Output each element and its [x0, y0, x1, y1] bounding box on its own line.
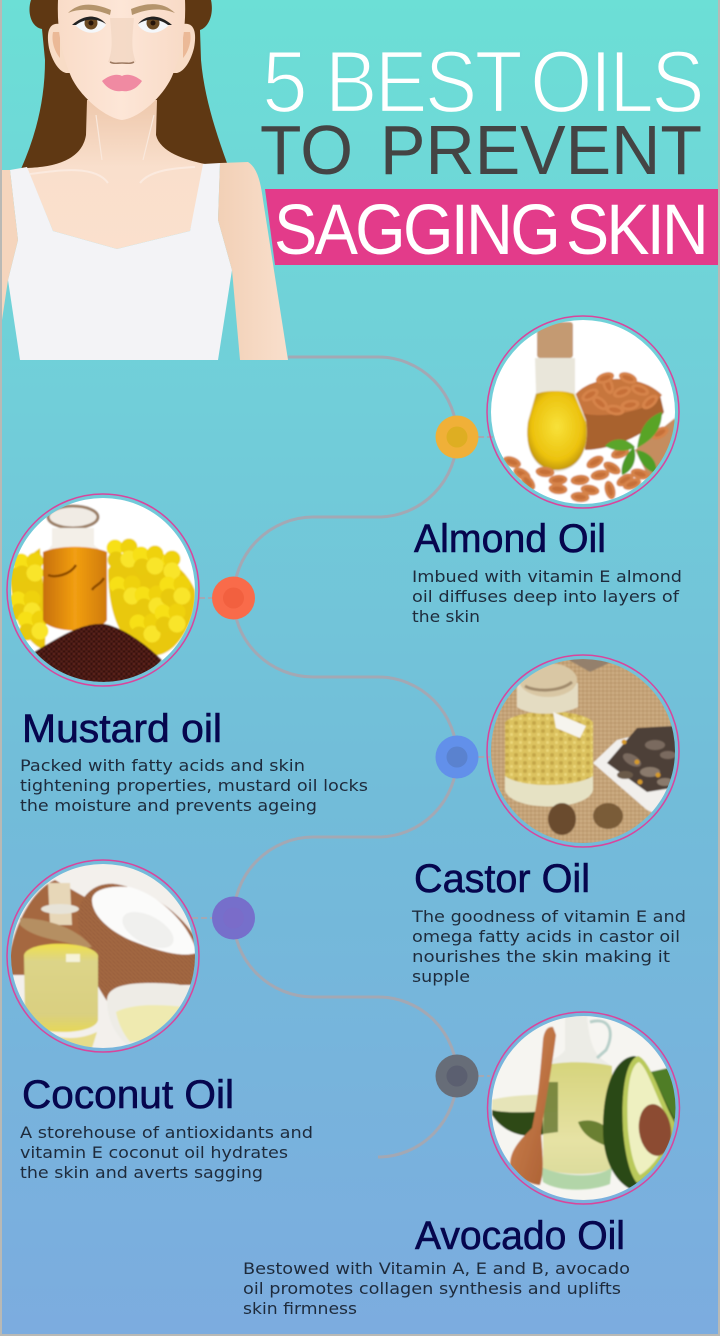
title line 1: BEST [325, 32, 521, 131]
body: skin firmness [243, 1299, 357, 1318]
illustration: woman with sagging skin [2, 0, 288, 360]
body: vitamin E coconut oil hydrates [20, 1143, 288, 1162]
heading: Mustard oil [22, 707, 222, 751]
dot: coconut [212, 896, 255, 940]
brows [68, 5, 111, 15]
title banner [265, 189, 718, 265]
dot: mustard [212, 576, 255, 620]
text: mustard oil [20, 707, 368, 815]
face [58, 0, 185, 120]
lips [102, 75, 142, 91]
dish [592, 736, 668, 813]
body: oil diffuses deep into layers of [412, 587, 679, 606]
heading: Almond Oil [414, 517, 606, 561]
photo: almond oil [486, 315, 680, 509]
back husk [8, 880, 90, 975]
coconut shell [78, 884, 200, 1005]
text: avocado oil [243, 1214, 630, 1318]
body: oil promotes collagen synthesis and uplifts [243, 1279, 621, 1298]
body: Imbued with vitamin E almond [412, 567, 682, 586]
flowers [108, 553, 195, 655]
ears [48, 24, 72, 73]
spoon [510, 1027, 556, 1185]
heading: Castor Oil [414, 857, 590, 901]
dish [106, 982, 180, 1006]
connector ticks [192, 437, 494, 1076]
bottle [537, 322, 573, 358]
title line 3: SAGGING [274, 191, 558, 270]
dot: avocado [436, 1054, 478, 1098]
body: the moisture and prevents ageing [20, 796, 317, 815]
title line 1: OILS [530, 32, 702, 131]
body: Bestowed with Vitamin A, E and B, avocado [243, 1259, 630, 1278]
connecting path [234, 357, 457, 1157]
text: castor oil [411, 857, 686, 986]
heading: Coconut Oil [22, 1073, 234, 1117]
jug [552, 1016, 608, 1064]
body: Packed with fatty acids and skin [20, 756, 305, 775]
body: tightening properties, mustard oil locks [20, 776, 368, 795]
dot: almond [436, 416, 478, 458]
body: nourishes the skin making it [412, 947, 670, 966]
right arm [218, 162, 288, 360]
body: A storehouse of antioxidants and [20, 1123, 313, 1142]
photo: coconut oil [6, 859, 200, 1053]
dot: castor [436, 736, 478, 778]
seeds [34, 624, 162, 683]
left avocado [492, 1109, 544, 1136]
coconut flesh [92, 887, 197, 955]
body: the skin and averts sagging [20, 1163, 263, 1182]
avocado half [603, 1056, 677, 1190]
title line 2: PREVENT [380, 111, 702, 189]
hair [21, 0, 227, 169]
ring [487, 655, 679, 847]
ring [7, 494, 199, 686]
heading: Avocado Oil [415, 1214, 625, 1258]
jar [504, 776, 594, 808]
photo: avocado oil [486, 1011, 680, 1205]
eyes [75, 20, 106, 33]
photo: mustard oil [6, 493, 200, 687]
title line 1: 5 [262, 32, 305, 131]
ring [7, 860, 199, 1052]
text: almond oil [412, 517, 682, 626]
title line 2: TO [260, 111, 353, 189]
body: the skin [412, 607, 480, 626]
body: omega fatty acids in castor oil [412, 927, 680, 946]
jar [48, 506, 98, 528]
title line 3: SKIN [566, 191, 706, 270]
left arm [2, 170, 18, 320]
back avocado [650, 1068, 678, 1120]
photo: castor oil [486, 654, 680, 848]
body: supple [412, 967, 470, 986]
title [260, 32, 718, 270]
ring [487, 316, 679, 508]
top [8, 163, 232, 360]
body: The goodness of vitamin E and [411, 907, 686, 926]
nuts [548, 803, 576, 835]
text: coconut oil [20, 1073, 313, 1182]
neck and chest [27, 100, 205, 249]
ring [488, 1012, 680, 1204]
bottle [48, 883, 72, 925]
nose [110, 62, 134, 63]
